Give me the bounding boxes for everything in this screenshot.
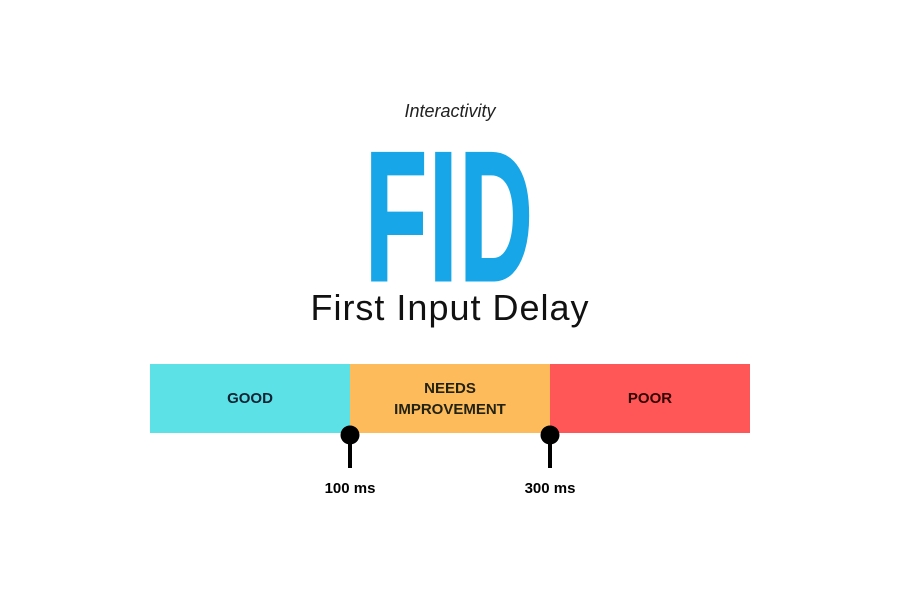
title: FID: FID [365, 113, 535, 319]
marker: 300 ms [525, 426, 575, 497]
marker: 300 ms: 300 ms [525, 480, 575, 497]
subtitle: Interactivity: Interactivity [404, 101, 496, 121]
segment: needs improvement: IMPROVEMENT [394, 400, 506, 418]
segment: good [150, 364, 350, 433]
segment: needs improvement [350, 364, 550, 433]
segment: good: GOOD [227, 390, 273, 407]
segment: poor [550, 364, 750, 433]
heading: First Input Delay: First Input Delay [310, 287, 590, 328]
segment: poor: POOR [628, 390, 672, 407]
segment: needs improvement: NEEDS [424, 380, 476, 396]
marker: 100 ms [325, 426, 375, 497]
marker: 100 ms: 100 ms [325, 480, 375, 497]
scale bar [150, 364, 750, 433]
